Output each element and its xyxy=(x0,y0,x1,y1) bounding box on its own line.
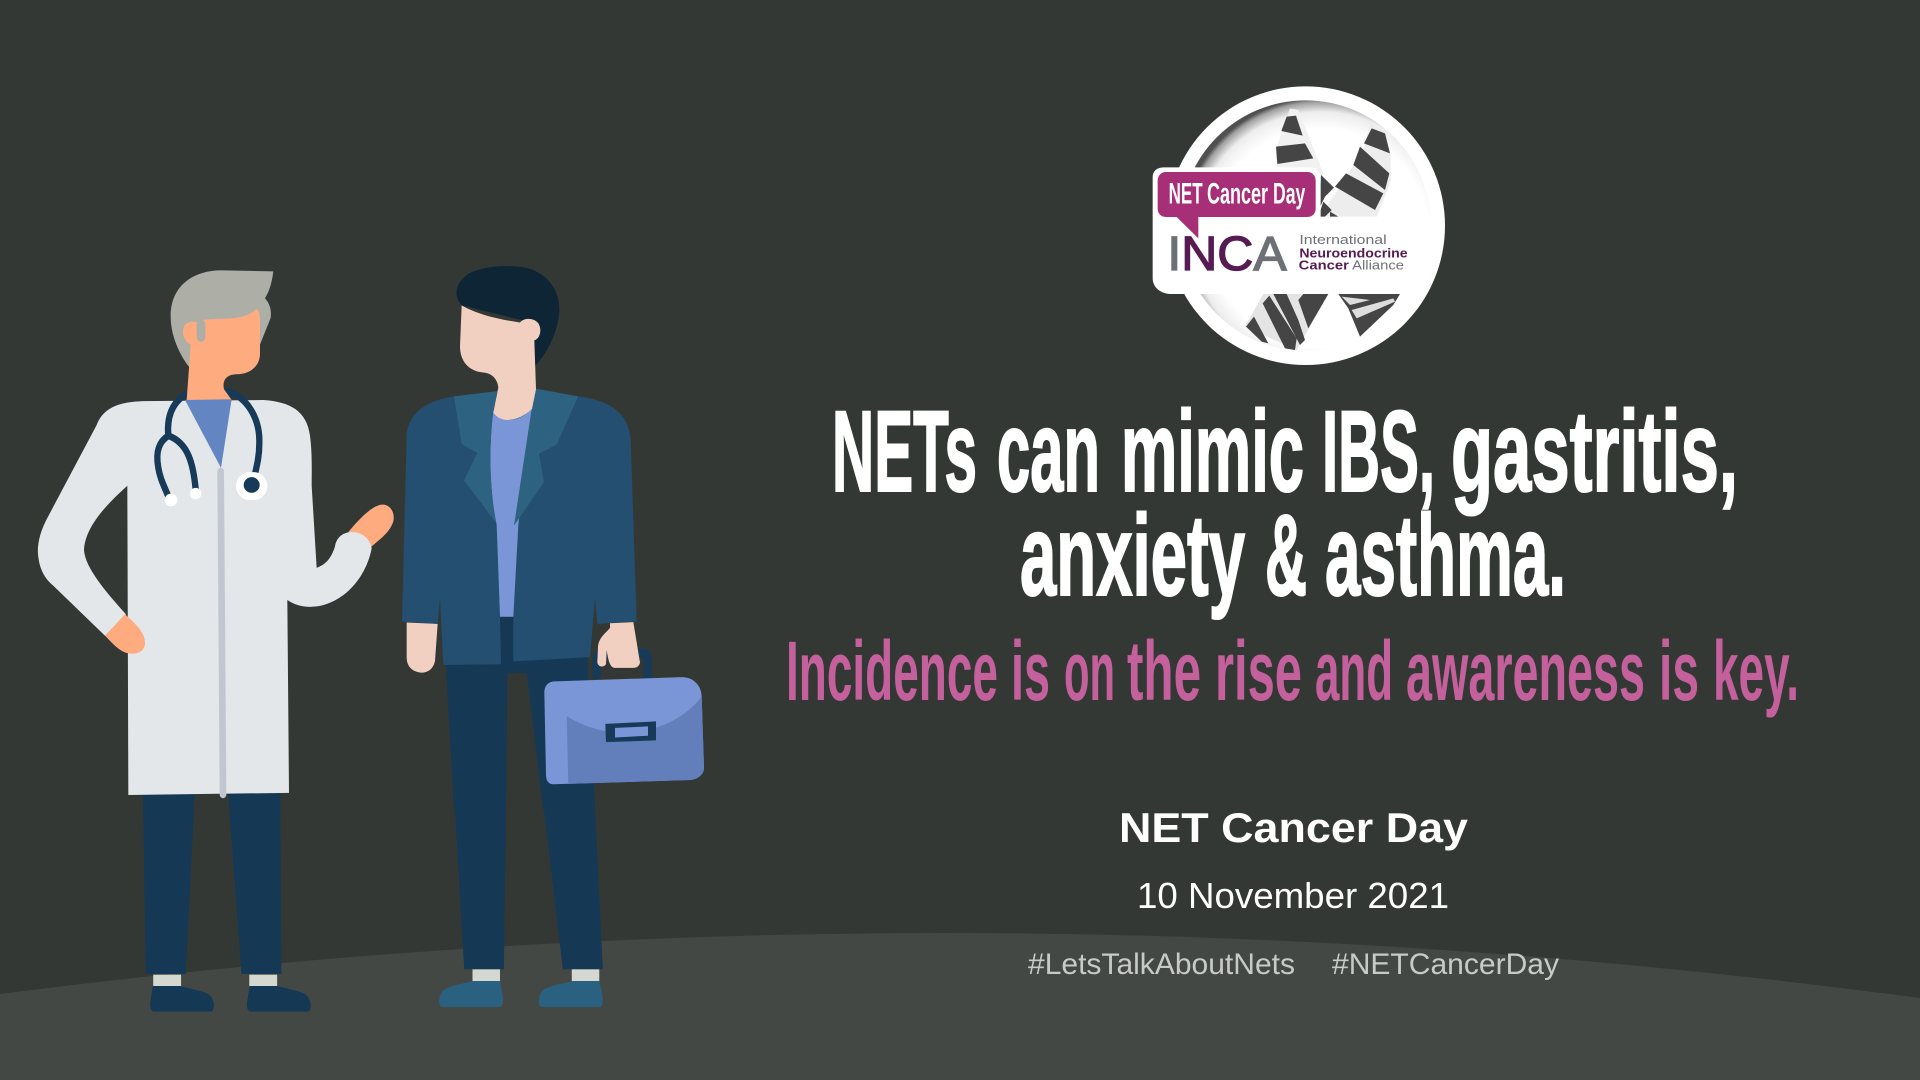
ground curve xyxy=(0,933,1920,1080)
headline xyxy=(832,388,1738,620)
INCA wordmark: INCA xyxy=(1167,227,1287,281)
headline: anxiety xyxy=(1020,492,1245,620)
alliance name xyxy=(1299,232,1408,272)
subheading: is xyxy=(1011,624,1050,718)
event date: 10 November 2021 xyxy=(1137,875,1449,916)
hashtags: #NETCancerDay xyxy=(1332,948,1559,981)
headline: mimic xyxy=(1121,388,1304,516)
logo: NET Cancer Day / INCA badge xyxy=(1153,86,1445,365)
subheading: and xyxy=(1315,624,1393,718)
briefcase xyxy=(544,677,704,784)
event name: NET Cancer Day xyxy=(1119,804,1469,851)
subheading: rise xyxy=(1215,624,1302,718)
doctor trousers and shoes xyxy=(143,790,311,1012)
speech bubble: NET xyxy=(1169,177,1203,210)
doctor upper body xyxy=(38,270,394,795)
hashtags: #LetsTalkAboutNets xyxy=(1028,948,1295,981)
headline: & xyxy=(1265,492,1307,620)
zebra ribbon xyxy=(1245,108,1400,350)
illustration: patient with briefcase xyxy=(402,266,704,1007)
white panel behind logo text xyxy=(1153,167,1438,294)
speech bubble xyxy=(1158,172,1316,238)
subheading: the xyxy=(1127,624,1201,718)
alliance name: Cancer Alliance xyxy=(1299,257,1404,272)
alliance name: Neuroendocrine xyxy=(1299,245,1408,260)
patient lower legs and shoes xyxy=(439,777,603,1007)
subheading: on xyxy=(1064,624,1115,718)
subheading xyxy=(786,624,1799,718)
badge ring and disc xyxy=(1166,86,1445,365)
subheading: key. xyxy=(1713,624,1799,718)
headline: can xyxy=(997,388,1100,516)
patient upper body xyxy=(402,266,704,810)
headline: gastritis, xyxy=(1451,388,1738,516)
speech bubble: Day xyxy=(1273,177,1306,210)
subheading: awareness xyxy=(1406,624,1645,718)
subheading: Incidence xyxy=(786,624,998,718)
speech bubble: Cancer xyxy=(1207,177,1268,210)
headline: NETs xyxy=(832,388,977,516)
illustration: doctor xyxy=(38,270,394,1012)
alliance name: International xyxy=(1299,232,1387,247)
subheading: is xyxy=(1659,624,1699,718)
hashtags xyxy=(1028,948,1559,981)
headline: IBS, xyxy=(1322,388,1435,516)
headline: asthma. xyxy=(1325,492,1566,620)
